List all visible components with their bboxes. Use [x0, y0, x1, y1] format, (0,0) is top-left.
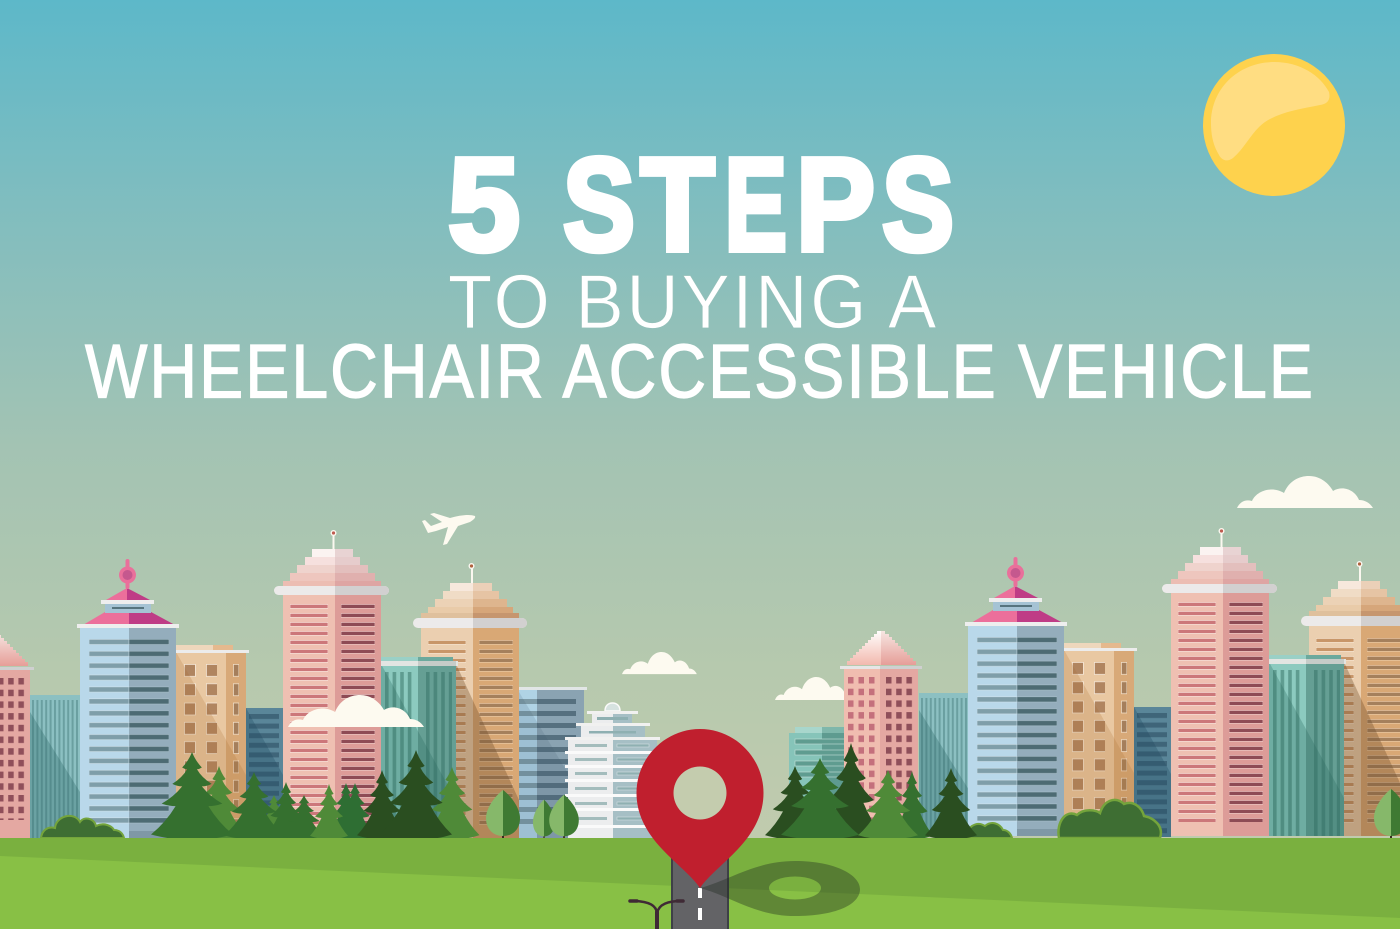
building: tan mid-rise right — [1064, 643, 1137, 836]
pin shadow — [700, 861, 860, 916]
leaf tree: far right — [1374, 789, 1400, 838]
heading: 5 steps: P — [796, 131, 875, 278]
building: teal back — [30, 695, 80, 838]
building: blue tower right — [965, 557, 1067, 836]
spruce trees: right group — [765, 743, 977, 838]
building: teal front — [381, 657, 458, 838]
heading: 5 steps: 5 — [448, 131, 520, 278]
city skyline: right — [789, 528, 1400, 838]
cloud: over pink tower — [288, 695, 424, 727]
building: dark blue — [246, 708, 283, 838]
building: pink tower right — [1162, 528, 1277, 836]
building: dark blue right — [1134, 707, 1171, 837]
heading: 5 steps: T — [640, 131, 714, 278]
cloud: center — [622, 652, 697, 674]
building: blue glass — [519, 687, 587, 838]
city skyline: left — [0, 530, 660, 839]
icon: map pin — [636, 729, 764, 888]
building: tan tower — [413, 563, 527, 838]
icon: airplane — [422, 513, 475, 545]
building: teal back right — [919, 693, 969, 836]
icon: street lamp — [630, 901, 683, 929]
building: pink short — [840, 631, 922, 838]
heading: 5 steps: S — [563, 131, 635, 278]
building: tan tower right — [1301, 561, 1400, 836]
bush: left — [41, 816, 124, 838]
cloud: top right — [1237, 476, 1373, 508]
building: pink tower — [274, 530, 389, 838]
cloud: center right — [775, 677, 853, 700]
heading: 5 steps: E — [724, 131, 787, 278]
title — [85, 131, 1313, 415]
leaf trees: left group — [486, 790, 579, 838]
spruce trees: left group — [151, 750, 480, 838]
building: pink edge — [0, 632, 34, 839]
building: teal small — [789, 727, 855, 838]
bush: behind right trees — [965, 823, 1012, 838]
heading: 5 steps: S — [882, 131, 954, 278]
road — [671, 838, 729, 929]
ground — [0, 838, 1400, 929]
building: blue tower — [77, 559, 179, 838]
icon: sun — [1203, 54, 1345, 196]
subheading: wheelchair accessible vehicle: WHEELCHAIR ACCESSIBLE VEHICLE — [85, 330, 1313, 415]
bush: right — [1058, 800, 1161, 838]
subheading: to buying a: TO BUYING A — [448, 259, 937, 344]
building: teal front right — [1269, 655, 1346, 836]
building: tan mid-rise — [176, 645, 249, 838]
building: white stepped — [565, 703, 660, 838]
